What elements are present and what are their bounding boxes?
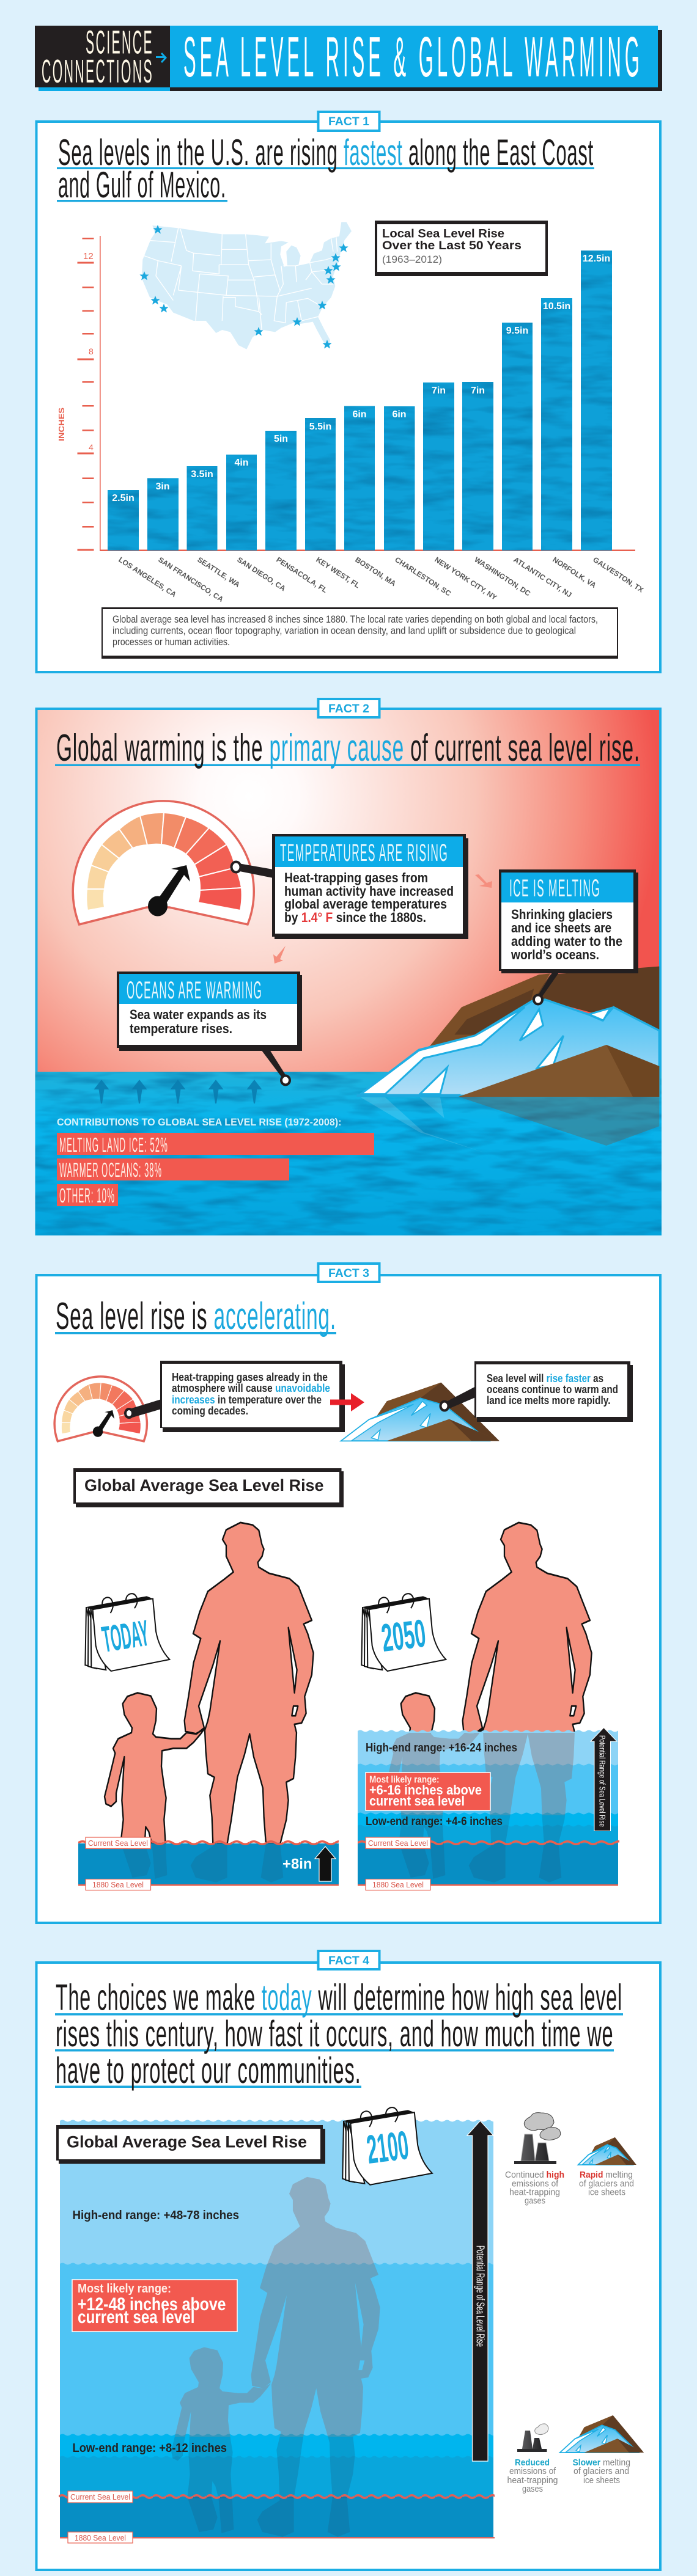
note box: including currents, ocean floor topography, variation in ocean density, and land uplift or subsidence due to geological xyxy=(112,624,576,637)
range label: high end: High-end range: +16-24 inches xyxy=(366,1741,517,1755)
fact 4 heading xyxy=(55,1977,623,2091)
note box xyxy=(101,607,618,659)
city labels: NEW YORK CITY, NY xyxy=(433,555,498,602)
arrow: +8in xyxy=(315,1846,336,1881)
callout: ice is melting: world’s oceans. xyxy=(511,947,599,962)
text: rapid melting: Rapid melting xyxy=(580,2170,633,2180)
range box: most likely: current sea level xyxy=(369,1793,465,1809)
city labels: SEATTLE, WA xyxy=(196,555,242,589)
bar value labels: 4in xyxy=(234,458,249,468)
callout: rise faster: oceans continue to warm and xyxy=(487,1383,618,1396)
fact 3 tab xyxy=(318,1264,379,1282)
arrow: potential range xyxy=(467,2121,493,2461)
callout: temperatures are rising: global average temperatures xyxy=(284,896,447,912)
range box: most likely xyxy=(72,2280,237,2332)
fact 2 tab: FACT 2 xyxy=(328,703,369,715)
range box: most likely: Most likely range: xyxy=(369,1774,439,1785)
bar chart: local sea level rise xyxy=(57,236,645,604)
panel: fact 2 xyxy=(35,699,662,1235)
icon: slower melting mountain xyxy=(560,2415,644,2453)
connector: gauge to temperature box xyxy=(231,862,273,878)
city labels xyxy=(117,555,645,604)
header banner: CONNECTIONS xyxy=(42,53,153,90)
city labels: LOS ANGELES, CA xyxy=(117,555,178,599)
chart title box: Global Average Sea Level Rise xyxy=(84,1476,324,1495)
fact 3 heading: Sea level rise is accelerating. xyxy=(56,1295,336,1337)
contributions bars: CONTRIBUTIONS TO GLOBAL SEA LEVEL RISE (1972-2008): xyxy=(57,1116,341,1128)
bar value labels: 3in xyxy=(155,481,170,492)
current sea level wave xyxy=(78,1840,339,1846)
range box: most likely: +6-16 inches above xyxy=(369,1782,482,1798)
fact 1 heading xyxy=(57,132,594,205)
text: high emissions: emissions of xyxy=(512,2179,559,2189)
callout: oceans are warming: temperature rises. xyxy=(130,1021,232,1036)
1880 level line xyxy=(358,1884,618,1886)
arrow: potential range: Potential Range of Sea Level Rise xyxy=(474,2245,487,2347)
city labels: PENSACOLA, FL xyxy=(275,555,329,595)
city labels: WASHINGTON, DC xyxy=(473,555,533,598)
callout: ice is melting xyxy=(499,869,638,973)
arrow: to ice melting xyxy=(475,874,492,888)
city labels: SAN DIEGO, CA xyxy=(235,555,287,593)
bar value labels: 3.5in xyxy=(191,469,213,480)
note box: Global average sea level has increased 8 inches since 1880. The local rate varies depending on both global and local factors, xyxy=(112,613,598,625)
bar value labels: 7in xyxy=(471,386,485,396)
connector: mountain to text xyxy=(440,1386,477,1410)
connector: ice box to glacier xyxy=(534,973,559,1004)
chart axis: 4 xyxy=(89,442,94,452)
arrow: potential range xyxy=(591,1728,617,1831)
chart axis: 8 xyxy=(89,346,94,356)
text: high emissions: gases xyxy=(525,2196,545,2206)
contributions bars: OTHER: 10% xyxy=(59,1184,115,1207)
rising water arrows xyxy=(94,1080,262,1103)
header banner xyxy=(35,24,662,91)
callout: rise faster xyxy=(474,1361,633,1422)
panel: fact 4 xyxy=(37,1951,660,2570)
fact 1 heading: and Gulf of Mexico. xyxy=(58,164,226,205)
small mountain xyxy=(341,1383,500,1441)
icon: rapid melting mountain xyxy=(578,2137,636,2165)
bar value labels: 6in xyxy=(352,409,367,420)
text: rapid melting: ice sheets xyxy=(588,2187,625,2197)
city labels: SAN FRANCISCO, CA xyxy=(157,555,225,604)
chart axis xyxy=(57,236,635,551)
range label: high end: High-end range: +48-78 inches xyxy=(72,2209,239,2222)
contributions bars: MELTING LAND ICE: 52% xyxy=(59,1133,168,1156)
bar value labels: 12.5in xyxy=(583,254,610,264)
water: today xyxy=(78,1843,339,1884)
city labels: BOSTON, MA xyxy=(353,555,397,588)
contributions bars: WARMER OCEANS: 38% xyxy=(59,1158,162,1181)
series label xyxy=(42,24,153,90)
text: slower melting xyxy=(572,2457,630,2486)
1880 level line xyxy=(60,2537,495,2538)
chart title box xyxy=(56,2125,325,2164)
submerged figures: 2100 xyxy=(171,2177,380,2537)
label: current sea level: Current Sea Level xyxy=(88,1839,148,1848)
callout: unavoidable increases: atmosphere will cause unavoidable xyxy=(172,1382,330,1394)
range box: most likely xyxy=(366,1773,490,1810)
bar value labels: 7in xyxy=(432,386,446,396)
range box: most likely: current sea level xyxy=(78,2307,194,2327)
bar value labels: 6in xyxy=(392,409,407,420)
water layers: 2050 xyxy=(358,1729,618,1884)
small gauge xyxy=(54,1377,147,1441)
current sea level wave xyxy=(358,1840,619,1846)
scene: 2050 xyxy=(358,1523,619,1890)
fact 2 tab xyxy=(318,699,379,717)
callout: temperatures are rising: human activity have increased xyxy=(284,884,454,899)
city labels: NORFOLK, VA xyxy=(551,555,598,590)
calendar: today xyxy=(85,1594,169,1671)
chart legend box: Local Sea Level Rise xyxy=(382,227,504,241)
callout: unavoidable increases: coming decades. xyxy=(172,1405,248,1417)
icon: header arrow xyxy=(156,53,166,62)
bar value labels xyxy=(112,254,610,503)
arrow: red xyxy=(330,1393,364,1411)
label: current sea level: Current Sea Level xyxy=(368,1839,428,1848)
callout: ice is melting: Shrinking glaciers xyxy=(511,907,613,922)
range box: most likely: +12-48 inches above xyxy=(78,2294,226,2314)
chart axis: 12 xyxy=(83,251,94,262)
range label: low end: Low-end range: +4-6 inches xyxy=(366,1815,503,1828)
1880 level line xyxy=(78,1884,339,1886)
callout: oceans are warming: OCEANS ARE WARMING xyxy=(127,977,262,1004)
ocean xyxy=(35,1072,662,1235)
chart title box xyxy=(73,1468,344,1507)
text: rapid melting xyxy=(579,2170,634,2197)
callout: temperatures are rising: by 1.4° F since the 1880s. xyxy=(284,910,426,925)
chart legend box: (1963–2012) xyxy=(382,254,442,265)
note box: processes or human activities. xyxy=(112,636,230,648)
header banner: SCIENCE xyxy=(86,24,153,61)
callout: oceans are warming xyxy=(117,971,302,1051)
fact 1 tab xyxy=(318,112,379,131)
connector: small gauge to text xyxy=(125,1399,161,1418)
feet under water xyxy=(120,1843,283,1883)
text: reduced emissions: gases xyxy=(522,2484,543,2494)
chart title box: Global Average Sea Level Rise xyxy=(67,2132,307,2151)
fact 4 tab xyxy=(318,1951,379,1969)
bar value labels: 9.5in xyxy=(506,326,528,336)
bar value labels: 10.5in xyxy=(543,301,570,312)
text: rapid melting: of glaciers and xyxy=(579,2179,634,2189)
callout: rise faster: land ice melts more rapidly. xyxy=(487,1394,610,1407)
US map with city stars xyxy=(139,222,352,349)
chart legend box xyxy=(375,221,548,276)
text: high emissions: Continued high xyxy=(505,2170,564,2180)
callout: unavoidable increases: increases in temperature over the xyxy=(172,1394,322,1406)
contributions bars xyxy=(57,1116,374,1207)
label: 1880 sea level: 1880 Sea Level xyxy=(372,1880,424,1889)
calendar: 2050: 2050 xyxy=(379,1611,428,1660)
bar value labels: 5in xyxy=(274,434,288,444)
value: +8in: +8in xyxy=(282,1856,312,1872)
bar value labels: 2.5in xyxy=(112,493,135,503)
callout: temperatures are rising xyxy=(272,834,468,939)
callout: ice is melting: and ice sheets are xyxy=(511,920,611,935)
calendar: 2100 xyxy=(342,2107,432,2185)
callout: temperatures are rising: Heat-trapping gases from xyxy=(284,870,428,885)
calendar: today: TODAY xyxy=(100,1612,152,1660)
connector: oceans box to water xyxy=(261,1050,290,1085)
arrow: to oceans warming xyxy=(273,946,286,964)
fact 1 tab: FACT 1 xyxy=(328,115,369,128)
callout: ice is melting: adding water to the xyxy=(511,934,622,949)
text: high emissions: heat-trapping xyxy=(509,2187,560,2197)
calendar: 2100: 2100 xyxy=(364,2122,411,2172)
mountain and glacier scene xyxy=(356,967,659,1153)
calendar: 2050 xyxy=(361,1594,446,1671)
bar value labels: 5.5in xyxy=(309,422,331,432)
scene: today xyxy=(78,1523,339,1890)
callout: oceans are warming: Sea water expands as its xyxy=(130,1007,267,1022)
callout: unavoidable increases: Heat-trapping gases already in the xyxy=(172,1371,328,1383)
current sea level wave xyxy=(59,2494,495,2500)
arrow: potential range: Potential Range of Sea Level Rise xyxy=(598,1735,608,1827)
panel: fact 1 xyxy=(37,112,660,672)
fact 3 tab: FACT 3 xyxy=(328,1267,369,1280)
people silhouette: today xyxy=(105,1523,314,1844)
text: slower melting: Slower melting xyxy=(572,2457,630,2468)
range box: most likely: Most likely range: xyxy=(78,2282,171,2296)
callout: rise faster: Sea level will rise faster as xyxy=(487,1372,603,1385)
bars xyxy=(108,251,612,551)
text: high emissions xyxy=(505,2170,564,2206)
water layers: 2100 xyxy=(60,2119,493,2538)
range label: low end: Low-end range: +8-12 inches xyxy=(72,2442,227,2455)
text: slower melting: ice sheets xyxy=(583,2475,620,2486)
city labels: GALVESTON, TX xyxy=(591,555,645,595)
text: reduced emissions: Reduced xyxy=(515,2457,550,2468)
panel: fact 3 xyxy=(37,1264,660,1923)
chart legend box: Over the Last 50 Years xyxy=(382,240,522,252)
label: 1880 sea level: 1880 Sea Level xyxy=(75,2533,126,2542)
text: reduced emissions xyxy=(507,2457,558,2494)
fact 4 heading: have to protect our communities. xyxy=(56,2050,361,2091)
text: reduced emissions: emissions of xyxy=(509,2466,556,2476)
text: slower melting: of glaciers and xyxy=(573,2466,629,2476)
gauge xyxy=(73,801,254,924)
city labels: KEY WEST, FL xyxy=(314,555,361,590)
callout: unavoidable increases xyxy=(160,1361,345,1432)
text: reduced emissions: heat-trapping xyxy=(507,2475,558,2486)
submerged figures: 2050 xyxy=(383,1523,592,1883)
city labels: CHARLESTON, SC xyxy=(393,555,453,598)
chart axis: INCHES xyxy=(57,408,66,441)
people silhouette: 2050 xyxy=(383,1523,592,1844)
icon: high emissions factory xyxy=(514,2113,561,2164)
city labels: ATLANTIC CITY, NJ xyxy=(512,555,573,599)
panel: fact 2: TEMPERATURES ARE RISING xyxy=(280,840,448,866)
fact 4 tab: FACT 4 xyxy=(328,1955,369,1967)
label: 1880 sea level: 1880 Sea Level xyxy=(92,1880,144,1889)
label: current sea level: Current Sea Level xyxy=(70,2492,130,2501)
icon: reduced emissions factory xyxy=(517,2424,548,2452)
